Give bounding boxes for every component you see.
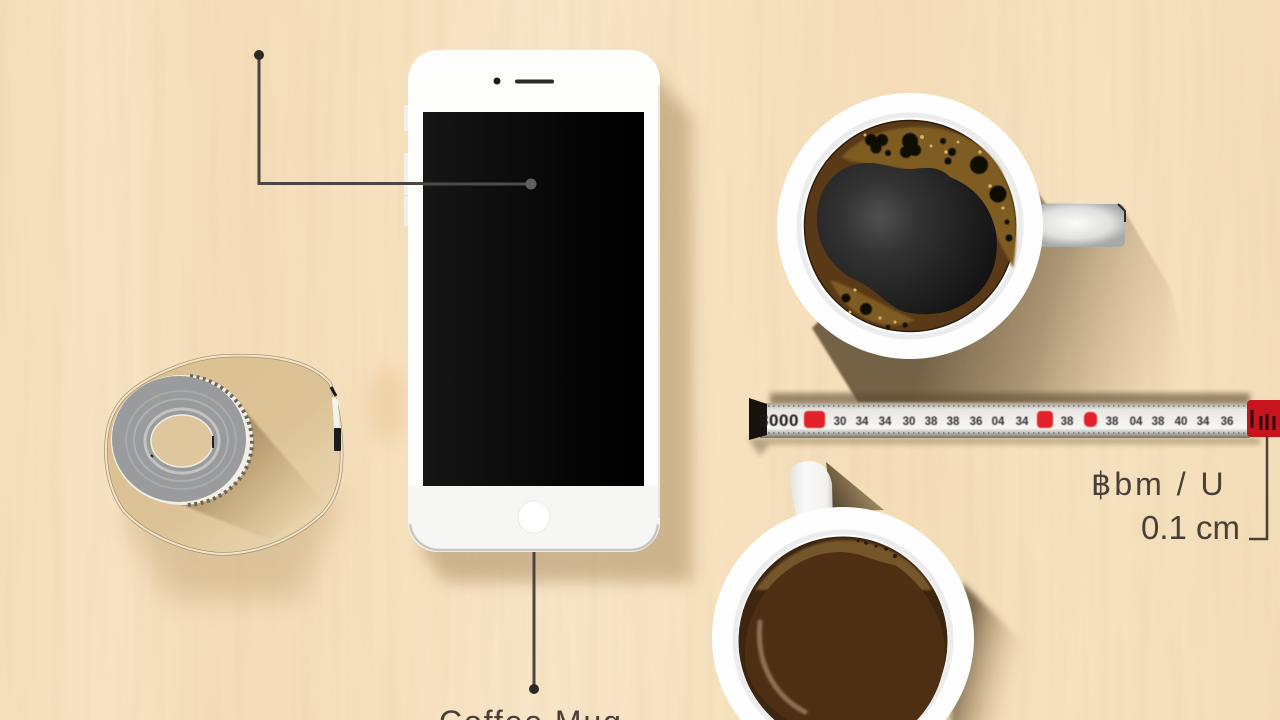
tape shadow xyxy=(770,393,1250,405)
mug rim xyxy=(712,507,974,720)
tape printed numerals: 3000 xyxy=(759,411,799,430)
red tape case end xyxy=(1247,400,1280,437)
foam specks xyxy=(857,540,897,558)
crema highlights xyxy=(848,134,1005,324)
label: tape measurement: 0.1 cm xyxy=(1141,509,1240,546)
crema foam xyxy=(830,127,1016,325)
tape roll shadow xyxy=(118,490,345,600)
home button xyxy=(518,501,550,533)
mug shadow xyxy=(950,582,1030,720)
coffee crescent xyxy=(755,540,932,590)
phone screen xyxy=(423,112,644,486)
measuring tape strip xyxy=(748,393,1280,456)
tape printed numerals: 34 xyxy=(856,416,869,428)
latte coffee mug xyxy=(712,461,1030,720)
tape band end marking xyxy=(331,387,341,451)
tape printed numerals: 04 xyxy=(1130,416,1143,428)
callout: phone bottom leader line xyxy=(529,552,539,694)
tape printed numerals: 38 xyxy=(925,416,938,428)
smartphone xyxy=(404,50,660,552)
camera xyxy=(494,78,500,84)
dark coffee surface xyxy=(817,163,997,314)
phone body xyxy=(408,50,660,552)
tape printed numerals: 30 xyxy=(834,416,846,428)
surface reflection xyxy=(759,622,805,712)
label: tape unit: ฿bm / U xyxy=(1091,466,1227,502)
tape printed numerals: 38 xyxy=(1061,416,1074,428)
tape printed numerals: 38 xyxy=(1106,416,1119,428)
tape printed numerals: 36 xyxy=(970,416,982,428)
tape printed numerals: 34 xyxy=(879,416,892,428)
side buttons xyxy=(404,105,409,226)
coffee rim band xyxy=(738,536,948,720)
tape printed numerals: 36 xyxy=(1221,416,1233,428)
callout: tape bracket line xyxy=(1249,437,1267,539)
callout: phone screen leader line xyxy=(254,50,536,190)
tape band loop xyxy=(106,356,342,554)
phone shadow xyxy=(420,68,692,582)
handle shadow xyxy=(826,462,884,512)
bubbles xyxy=(842,133,1012,329)
roll cast shadow xyxy=(170,405,322,540)
mug rim xyxy=(777,93,1043,359)
coiled tape xyxy=(111,375,253,505)
tape roll xyxy=(106,356,345,600)
lower bezel tint xyxy=(408,486,660,552)
mug handle xyxy=(1036,204,1125,247)
mug cast shadow xyxy=(812,140,1192,402)
tick marks xyxy=(768,406,1247,433)
mug handle xyxy=(790,461,833,520)
black coffee mug xyxy=(777,93,1192,402)
tape printed numerals: 34 xyxy=(1016,416,1029,428)
coffee surface xyxy=(745,552,945,720)
tape printed numerals: 04 xyxy=(992,416,1005,428)
tape body xyxy=(760,403,1250,438)
tape printed numerals xyxy=(759,411,1233,430)
tape printed numerals: 40 xyxy=(1175,416,1187,428)
tape black end hook xyxy=(749,398,767,440)
tape printed numerals: 38 xyxy=(947,416,960,428)
tape printed numerals: 30 xyxy=(903,416,915,428)
tape printed numerals: 34 xyxy=(1197,416,1210,428)
brew xyxy=(804,120,1016,332)
tape printed numerals: 38 xyxy=(1152,416,1165,428)
speaker xyxy=(515,80,554,84)
